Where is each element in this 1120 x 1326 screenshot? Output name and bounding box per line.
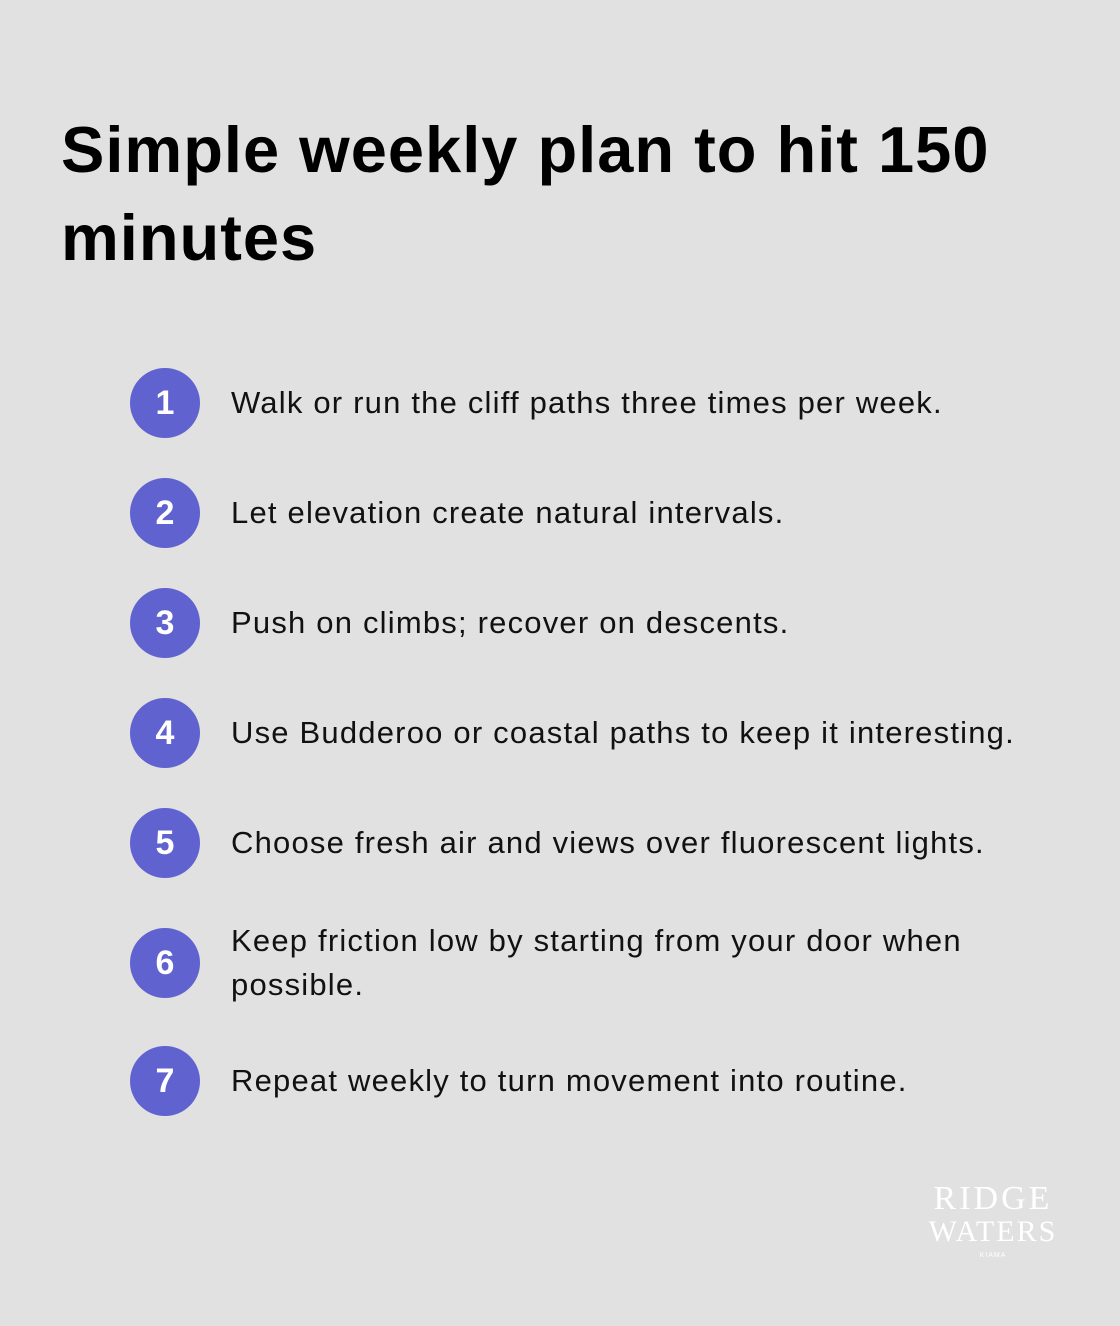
step 3 bbox=[130, 588, 789, 658]
step 1: 1 bbox=[156, 384, 174, 422]
step 7: Repeat weekly to turn movement into routine. bbox=[231, 1063, 908, 1098]
logo: WATERS bbox=[929, 1215, 1057, 1248]
step 5: 5 bbox=[156, 824, 174, 862]
step 3: Push on climbs; recover on descents. bbox=[231, 605, 789, 640]
step 1 bbox=[130, 368, 943, 438]
step 6: 6 bbox=[156, 944, 174, 982]
step 7: 7 bbox=[156, 1062, 174, 1100]
title: Simple weekly plan to hit 150 minutes bbox=[61, 113, 989, 274]
step 7 bbox=[130, 1046, 908, 1116]
step 5 bbox=[130, 808, 985, 878]
logo: RIDGE bbox=[934, 1180, 1052, 1217]
step 2: 2 bbox=[156, 494, 174, 532]
step 4 bbox=[130, 698, 1015, 768]
step 1: Walk or run the cliff paths three times per week. bbox=[231, 385, 943, 420]
step 5: Choose fresh air and views over fluorescent lights. bbox=[231, 825, 985, 860]
step 3: 3 bbox=[156, 604, 174, 642]
step 4: 4 bbox=[156, 714, 174, 752]
logo bbox=[928, 1180, 1057, 1259]
step 6: Keep friction low by starting from your door when possible. bbox=[231, 923, 962, 1002]
step 2 bbox=[130, 478, 784, 548]
logo: KIAMA bbox=[980, 1252, 1006, 1259]
step 2: Let elevation create natural intervals. bbox=[231, 495, 784, 530]
step 4: Use Budderoo or coastal paths to keep it interesting. bbox=[231, 715, 1015, 750]
